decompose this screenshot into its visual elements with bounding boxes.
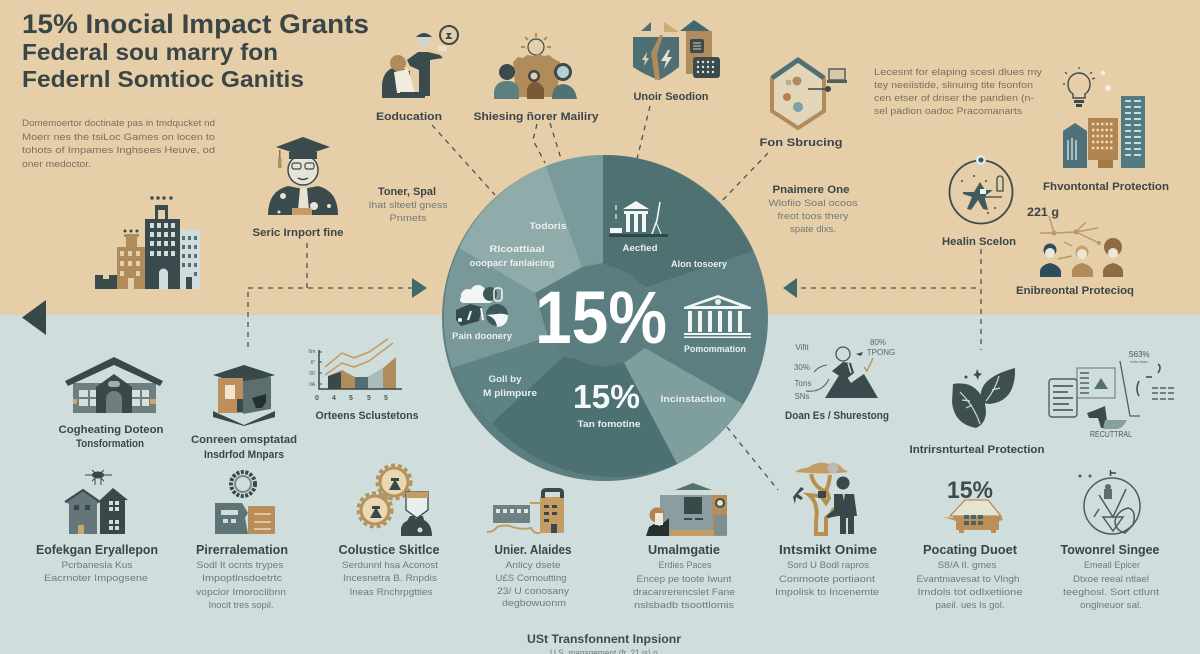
heading: Unier. Alaides: [494, 543, 572, 557]
pie chart: [442, 155, 768, 481]
heading: Intsmikt Onime: [779, 543, 877, 557]
icon: gear and documents: [215, 472, 275, 534]
heading: Pocating Duoet: [923, 543, 1018, 557]
title: Federal sou marry fon: [22, 39, 278, 65]
icon: documents and flow: mrto bsso: [1130, 359, 1149, 364]
description: [44, 560, 148, 584]
chart: line and area: 6°: [311, 360, 315, 366]
text: toner spal: Toner, Spal: [378, 186, 436, 198]
column: intsmikt: [775, 462, 879, 598]
icon: large temple: [684, 295, 751, 338]
title: Federnl Somtioc Ganitis: [22, 66, 304, 92]
chart: line and area: 5: [349, 395, 353, 402]
chart: line and area: [309, 339, 402, 402]
title: [22, 9, 369, 92]
intro text block: [22, 118, 215, 170]
column: colustice: [338, 465, 440, 598]
segment: top: [546, 155, 603, 267]
label: school house: Cogheating Doteon: [58, 424, 164, 436]
small percentage: 15%: [573, 378, 640, 415]
text: pnaimere one: Wlofiio Soal ocoos: [768, 198, 858, 209]
description: [1063, 560, 1159, 611]
connector: unior to pie: [637, 106, 650, 159]
segment labels: Goll by: [488, 374, 522, 385]
icon: mountain person with stats: 30%: [794, 363, 810, 372]
description: degbowuonm: [502, 598, 566, 609]
label: doan es shurestong: Doan Es / Shurestong: [785, 410, 889, 422]
description: Conmoote portiaont: [779, 574, 875, 585]
connectors: shiesing to pie: [533, 123, 562, 163]
heading: Towonrel Singee: [1060, 543, 1160, 557]
segment: left: [444, 248, 548, 368]
chart: line and area: 0A: [309, 382, 316, 388]
intro text block: Domemoertor doctinate pas in tmdqucket nd: [22, 118, 215, 129]
description: Dtxoe reeal ntlael: [1073, 574, 1149, 585]
intro text block: Moerr nes the tsiLoc Games on locen to: [22, 132, 215, 143]
arrow: left: [22, 300, 46, 335]
column: umalmgatie: [633, 483, 735, 611]
text: pnaimere one: Pnaimere One: [772, 184, 850, 196]
segment labels: Incinstaction: [660, 394, 726, 405]
segment labels: Pomommation: [684, 344, 746, 355]
right intro text: cen etser of driser the paridien (n-: [874, 93, 1034, 104]
icon: people with gear and sun: [494, 33, 577, 99]
description: [342, 560, 438, 598]
text: toner spal: Pnmets: [390, 213, 427, 224]
segment labels: M plimpure: [483, 388, 537, 399]
description: paeil. ues Is gol.: [936, 600, 1004, 611]
chart: line and area: 0: [315, 395, 319, 402]
description: onglneuor sal.: [1080, 600, 1142, 611]
stat: 221 g: 221 g: [1027, 205, 1059, 219]
column: pirerralemation: [196, 472, 288, 611]
icon: hexagon structure: [772, 60, 847, 128]
icon: 15 percent and tan building: 15%: [947, 477, 993, 504]
icon: block and tower: [487, 488, 564, 533]
description: nslsbadb tsoottlomis: [634, 600, 734, 611]
icon: leaves: [952, 368, 1015, 428]
description: S8/A Il. gmes: [938, 560, 997, 571]
label: health section: Healin Scelon: [942, 236, 1016, 248]
description: Emeall Epicer: [1084, 560, 1140, 571]
label: orteens: Orteens Sclustetons: [316, 410, 418, 422]
footer text: USt Transfonnent Inpsionr: [527, 634, 682, 646]
icon: school house: [65, 357, 163, 413]
segment labels: [452, 221, 746, 430]
label: environmental protection: Fhvontontal Protection: [1043, 181, 1169, 193]
right intro text: sel pádion oadoc Pracomanarts: [874, 106, 1022, 117]
column: eofekgan: [36, 470, 158, 584]
text: toner spal: [368, 186, 448, 224]
icon: light bulb: [1063, 67, 1111, 107]
icon: education: [382, 26, 458, 98]
segment: right: [645, 251, 767, 404]
segment labels: Rlcoattiaal: [490, 244, 544, 255]
description: [775, 560, 879, 598]
description: Impolisk to Incenemte: [775, 587, 879, 598]
description: [496, 560, 569, 609]
heading: Colustice Skitlce: [338, 543, 440, 557]
footer text: [527, 634, 682, 654]
big percentage: 15%: [535, 276, 667, 359]
chart: line and area: 5: [384, 395, 388, 402]
icon: environmental buildings: [1063, 96, 1145, 168]
segment labels: Alon tosoery: [671, 259, 728, 270]
column: unier alaides: [487, 488, 572, 609]
connector: health to pie: [783, 249, 981, 350]
icon: mountain person with stats: SNs: [794, 392, 810, 401]
label: school house: [58, 424, 164, 450]
right intro text: tey neeiistide, slinuing tite fsonfon: [874, 80, 1033, 91]
description: Erdies Paces: [658, 560, 712, 571]
icon: graduate: [268, 137, 338, 215]
description: 23/ U conosany: [497, 586, 569, 597]
chart: line and area: 00: [309, 371, 315, 377]
column: towonrel singee: [1060, 470, 1160, 611]
icon: mountain person with stats: Vifit: [795, 343, 809, 352]
label: graduate: Seric Irnport fine: [252, 227, 344, 239]
description: Irndols tot odlxetiione: [918, 587, 1022, 598]
label: school house: Tonsformation: [76, 438, 144, 450]
segment: lower right light: [624, 348, 743, 464]
description: vopclor Imoroclibnn: [196, 587, 286, 598]
label: open house: Insdrfod Mnpars: [204, 449, 284, 461]
icon: mountain person with stats: TPONG: [867, 348, 895, 357]
description: Ineas Rnchrpgtties: [350, 587, 433, 598]
label: open house: [191, 434, 297, 461]
description: Incesnetra B. Rnpdis: [343, 573, 437, 584]
heading: Umalmgatie: [648, 543, 720, 557]
description: [916, 560, 1022, 611]
text: toner spal: Ihat slteetl gness: [368, 200, 448, 211]
icon: gears and money: [358, 465, 432, 536]
chart: line and area: 0m: [309, 349, 315, 355]
icon: network and people: [1040, 216, 1123, 277]
description: U£S Cornoutting: [496, 573, 566, 584]
description: teeghosl. Sort ctlunt: [1063, 587, 1159, 598]
icon: bank and woman: [646, 483, 727, 536]
icon: world cluster: [456, 285, 508, 327]
description: Sord U Bodl rapros: [787, 560, 869, 571]
right intro text: Lecesnt for elaping scesl dlues my: [874, 67, 1042, 78]
description: Sodl It ocnts trypes: [196, 560, 284, 571]
segment: lower left: [452, 337, 563, 423]
connector: fon to pie: [720, 153, 768, 203]
description: Pcrbanesla Kus: [62, 560, 133, 571]
segment: upper left light: [459, 166, 582, 293]
icon: documents and flow: RECUTTRAL: [1090, 430, 1132, 439]
title: 15% Inocial Impact Grants: [22, 9, 369, 39]
description: Inocit tres sopil.: [208, 600, 274, 611]
icon: tree and businessman: [793, 462, 857, 534]
segment labels: Todoris: [530, 221, 566, 232]
intro text block: tohots of Impames Inghsees Heuve, od: [22, 145, 215, 156]
segment labels: Aecfied: [622, 243, 658, 254]
icon: houses and drone: [65, 470, 128, 534]
text: pnaimere one: freot toos thery: [778, 211, 849, 222]
label: unior section: Unoir Seodion: [634, 91, 709, 103]
segment: top right: [603, 155, 753, 287]
description: Impoptlnsdoetrtc: [202, 573, 282, 584]
description: Eacrnoter Impogsene: [44, 573, 148, 584]
center circle: [552, 266, 652, 366]
text: pnaimere one: spate dlxs.: [790, 224, 836, 235]
segment labels: ooopacr fanlaicing: [470, 258, 555, 269]
label: environmental protecting: Enibreontal Protecioq: [1016, 285, 1134, 297]
icon: city buildings: [95, 196, 200, 289]
description: Serdunnl hsa Aconost: [342, 560, 438, 571]
icon: health circle: [950, 155, 1012, 224]
column: pocating duoet: [916, 477, 1022, 611]
description: Anlicy dsete: [506, 560, 560, 571]
intro text block: oner medoctor.: [22, 159, 91, 170]
connector: lower right to pie: [727, 427, 778, 490]
icon: mountain person with stats: [794, 338, 895, 401]
icon: documents and flow: S63%: [1128, 350, 1150, 359]
connector: education to pie: [432, 125, 495, 195]
icon: small temple: [609, 201, 668, 237]
segment labels: Tan fomotine: [578, 419, 640, 430]
description: [633, 560, 735, 611]
label: shiesing: Shiesing ñorer Mailiry: [474, 111, 599, 123]
heading: Pirerralemation: [196, 543, 288, 557]
icon: shield and security: [633, 20, 720, 80]
chart: line and area: 5: [367, 395, 371, 402]
segment: bottom: [492, 357, 677, 477]
icon: documents and flow: [1049, 350, 1174, 439]
label: education: Eoducation: [376, 111, 442, 123]
icon: mountain person with stats: 80%: [870, 338, 886, 347]
chart: line and area: 4: [332, 395, 336, 402]
icon: circle with triangles: [1078, 470, 1140, 534]
description: dracanrerencslet Fane: [633, 587, 735, 598]
label: open house: Conreen omsptatad: [191, 434, 297, 446]
connector: graduate to pie: [248, 243, 427, 352]
label: fon structing: Fon Sbrucing: [760, 137, 842, 149]
segment labels: Pain doonery: [452, 331, 513, 342]
description: [196, 560, 286, 611]
icon: open house cutaway: [213, 365, 275, 426]
icon: mountain person with stats: Tons: [795, 379, 811, 388]
right intro text: [874, 67, 1042, 117]
heading: Eofekgan Eryallepon: [36, 543, 158, 557]
description: Encep pe toote Iwunt: [636, 574, 732, 585]
description: Evantniavesat to Vlngh: [916, 574, 1020, 585]
text: pnaimere one: [768, 184, 858, 235]
label: infrastructural protection: Intrirsnturteal Protection: [910, 444, 1045, 456]
